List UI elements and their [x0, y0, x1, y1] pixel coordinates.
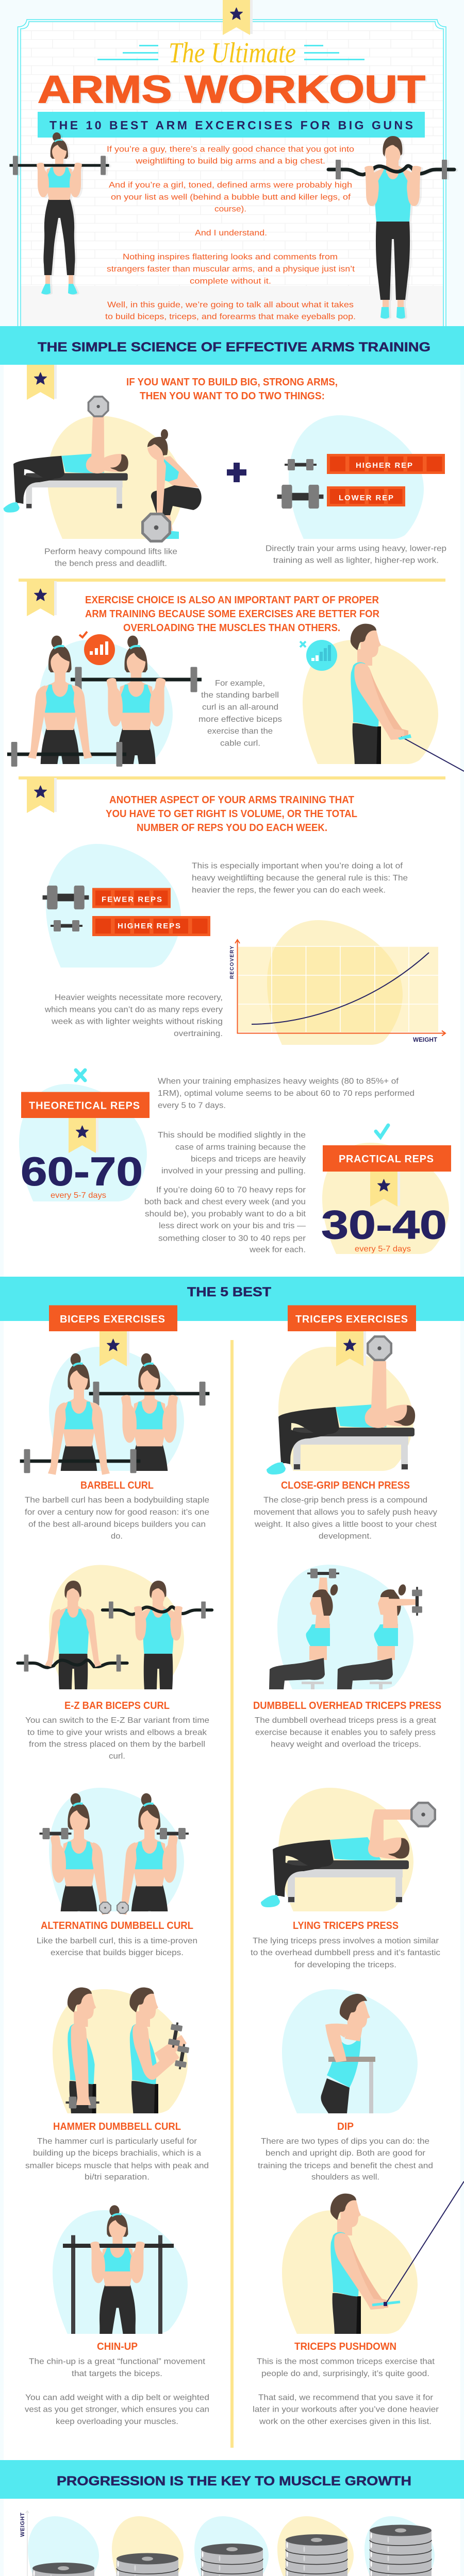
description: heavy weight and overload the triceps.: [271, 1740, 421, 1749]
figure: women barbell curl: [7, 636, 202, 767]
icon: cross: [76, 1070, 85, 1080]
description: You can add weight with a dip belt or weighted: [25, 2394, 209, 2402]
figure: [65, 1988, 190, 2123]
description: do.: [111, 1532, 123, 1540]
label: lower rep: [327, 486, 405, 506]
name: BARBELL CURL: [80, 1480, 154, 1491]
heading: ANOTHER ASPECT OF YOUR ARMS TRAINING THAT: [109, 794, 354, 806]
section banner: progression: [0, 2460, 464, 2499]
description: smaller biceps muscle that helps with peak and: [25, 2162, 209, 2170]
ribbon: [27, 365, 57, 400]
example text: exercise than the: [207, 727, 273, 736]
intro text: strangers faster than muscular arms, and a physique just isn’t: [107, 265, 355, 274]
description: [25, 1716, 209, 1761]
example text: For example,: [215, 679, 265, 688]
description: training the triceps and benefit the chest and: [258, 2162, 433, 2170]
caption right: Directly train your arms using heavy, lower-rep: [266, 544, 446, 553]
icon: large dumbbell: [43, 886, 89, 909]
description: The barbell curl has been a bodybuilding staple: [25, 1496, 209, 1504]
blob: yellow: [47, 416, 184, 539]
label: higher rep: HIGHER REP: [356, 461, 412, 470]
figure: [321, 1994, 375, 2113]
description: from the stress placed on them by the barbell: [29, 1740, 205, 1749]
every 5-7 days: every 5-7 days: [51, 1191, 106, 1200]
description: [253, 2358, 439, 2426]
description: of the best all-around biceps builders you can: [28, 1520, 206, 1529]
description: vest as you get stronger, which ensures you can: [25, 2405, 209, 2414]
heading: IF YOU WANT TO BUILD BIG, STRONG ARMS,: [126, 377, 338, 388]
description: [258, 2137, 433, 2181]
description: There are two types of dips you can do: the: [261, 2137, 429, 2146]
description: [25, 1496, 209, 1540]
exercise: lying triceps press: [251, 1788, 440, 1969]
modified volume text: should be), you probably want to do a bit: [145, 1210, 306, 1218]
figure: [261, 1802, 436, 1907]
name: ALTERNATING DUMBBELL CURL: [41, 1920, 193, 1931]
blob: cyan: [46, 844, 181, 968]
blob: [49, 1788, 184, 1911]
exercise: close-grip bench press: [254, 1331, 437, 1540]
script title: The Ultimate: The Ultimate: [169, 37, 296, 69]
ribbon with star: [223, 0, 253, 35]
theoretical text: every 5 to 7 days.: [158, 1101, 226, 1110]
heading: EXERCISE CHOICE IS ALSO AN IMPORTANT PART OF PROPER: [85, 595, 379, 606]
label: THEORETICAL REPS: [29, 1100, 140, 1112]
modified volume text: both back and chest every week (and you: [144, 1197, 306, 1207]
description: bi/tri separation.: [85, 2173, 150, 2181]
icon: plus: [227, 463, 246, 482]
description: The dumbbell overhead triceps press is a great: [255, 1716, 437, 1725]
example text: curl is an all-around: [202, 703, 278, 712]
figure: man with EZ bar: [328, 136, 454, 318]
description: [25, 2358, 209, 2426]
ribbon: [370, 1172, 400, 1207]
stack 5: [370, 2524, 432, 2576]
label: lower rep: LOWER REP: [339, 494, 393, 502]
name: DUMBBELL OVERHEAD TRICEPS PRESS: [253, 1700, 441, 1711]
caption left: [44, 547, 177, 568]
intro text: on your list as well (behind a bubble butt and killer legs, of: [111, 193, 351, 202]
name: CHIN-UP: [97, 2341, 138, 2352]
heading: YOU HAVE TO GET RIGHT IS VOLUME, OR THE TOTAL: [106, 808, 357, 820]
modified volume text: case of arms training because the: [175, 1143, 306, 1152]
icon: large dumbbell: [277, 485, 323, 509]
exercise: triceps pushdown: [253, 2181, 464, 2426]
description: The chin-up is a great “functional” movement: [29, 2358, 206, 2366]
ribbon: [69, 1118, 98, 1153]
caption right: [266, 544, 446, 565]
label: higher reps: [92, 916, 210, 936]
description: for over a century now for good reason: it’s one: [25, 1508, 209, 1517]
intro text: Well, in this guide, we’re going to talk all about what it takes: [107, 301, 354, 309]
panel: two things: [4, 365, 446, 568]
heading: [85, 595, 380, 634]
description: [255, 1716, 437, 1749]
title flourish lines: [97, 45, 364, 60]
description: development.: [319, 1532, 372, 1540]
section banner: the 5 best: THE 5 BEST: [187, 1285, 271, 1299]
name: E-Z BAR BICEPS CURL: [64, 1700, 170, 1711]
description: The lying triceps press involves a motion similar: [253, 1937, 439, 1945]
exercise: barbell curl: [20, 1331, 209, 1538]
example text: the standing barbell: [201, 691, 279, 700]
heading: THEN YOU WANT TO DO TWO THINGS:: [140, 391, 325, 402]
figure: [39, 1793, 189, 1915]
description: [25, 2137, 209, 2181]
blob: [277, 1565, 413, 1689]
decorative frame: [18, 20, 446, 326]
explanation text: This is especially important when you’re doing a lot of: [192, 861, 403, 871]
description: for developing the triceps.: [294, 1961, 396, 1969]
theoretical reps card: [19, 1070, 150, 1201]
description: The close-grip bench press is a compound: [263, 1496, 427, 1504]
blob: yellow: [322, 1143, 449, 1254]
caption right: training as well as lighter, higher-rep work.: [273, 556, 439, 565]
intro text: And I understand.: [195, 229, 267, 238]
theoretical text: 1RM), optimal volume seems to be about 60 to 70 reps performed: [158, 1089, 415, 1098]
exercise: dip: [258, 1989, 433, 2181]
description: bench and upright dip. Both are good for: [266, 2149, 426, 2158]
section banner: the 5 best: [0, 1277, 464, 1321]
figure: [269, 1569, 422, 1690]
blob: [282, 2210, 418, 2334]
figure: woman deadlift: [141, 429, 202, 543]
blob: cyan: [289, 415, 424, 539]
description: exercise that builds bigger biceps.: [51, 1948, 184, 1957]
heading: [106, 794, 357, 834]
section banner: progression: PROGRESSION IS THE KEY TO MUSCLE GROWTH: [57, 2474, 411, 2488]
recovery text: overtraining.: [174, 1029, 223, 1038]
description: Like the barbell curl, this is a time-proven: [37, 1937, 197, 1945]
description: later in your workouts after you’ve done heavier: [253, 2405, 439, 2414]
subtitle banner: THE 10 BEST ARM EXCERCISES FOR BIG GUNS: [49, 118, 413, 132]
blob: [49, 1347, 184, 1471]
label: fewer reps: [92, 888, 171, 908]
label: higher rep: [327, 454, 445, 474]
description: that targets the biceps.: [72, 2369, 162, 2378]
label: [21, 1092, 150, 1118]
modified volume text: [144, 1131, 306, 1254]
brick wall background: [21, 22, 443, 326]
figure: [16, 1581, 213, 1689]
practical reps card: [321, 1125, 451, 1254]
blob: [53, 2210, 188, 2334]
name: LYING TRICEPS PRESS: [293, 1920, 399, 1931]
description: keep overloading your muscles.: [56, 2417, 178, 2426]
figure: [20, 1353, 209, 1475]
blob: [282, 1989, 418, 2113]
figure: [267, 1335, 415, 1475]
column divider: [230, 1340, 234, 2448]
figure: man bench press: [4, 396, 128, 513]
icon: effective check badge: [79, 632, 115, 665]
theoretical text: [158, 1077, 415, 1110]
main title: ARMS WORKOUT: [38, 67, 425, 111]
stack 1: [32, 2563, 94, 2576]
description: shoulders as well.: [311, 2173, 379, 2181]
figure: man cable curl: [351, 624, 464, 771]
intro text: If you’re a guy, there’s a really good chance that you got into: [107, 145, 354, 154]
intro text: And if you’re a girl, toned, defined arms were probably high: [109, 181, 352, 190]
intro text: to build biceps, triceps, and forearms that make eyeballs pop.: [105, 312, 356, 321]
label: [323, 1145, 451, 1172]
exercise: E-Z bar biceps curl: [18, 1565, 212, 1761]
blob: [53, 1989, 188, 2113]
progression chart: [20, 2511, 451, 2576]
recovery text: week as with lighter weights without risking: [51, 1017, 223, 1026]
blob: yellow: [303, 640, 438, 764]
modified volume text: something closer to 30 to 40 reps per: [158, 1234, 306, 1243]
description: building up the biceps brachialis, which is a: [33, 2149, 201, 2158]
y axis label: RECOVERY: [229, 946, 235, 979]
recovery text: Heavier weights necessitate more recovery,: [55, 993, 223, 1002]
column header: biceps: [49, 1306, 177, 1331]
blob: [49, 1565, 184, 1689]
section banner: simple science: THE SIMPLE SCIENCE OF EFFECTIVE ARMS TRAINING: [38, 340, 430, 354]
blob: [278, 1347, 413, 1471]
icon: small dumbbell: [51, 920, 82, 931]
ribbon: [336, 1331, 366, 1366]
name: HAMMER DUMBBELL CURL: [53, 2121, 181, 2132]
caption left: Perform heavy compound lifts like: [44, 547, 177, 556]
blob: yellow: [267, 920, 403, 1045]
exercise: chin-up: [25, 2205, 209, 2426]
theoretical text: When your training emphasizes heavy weights (80 to 85%+ of: [158, 1077, 399, 1086]
column header: triceps: TRICEPS EXERCISES: [295, 1314, 408, 1325]
column header: biceps: BICEPS EXERCISES: [60, 1314, 165, 1325]
panel: intro header: [9, 0, 454, 326]
every 5-7 days: every 5-7 days: [355, 1245, 411, 1253]
heading: NUMBER OF REPS YOU DO EACH WEEK.: [137, 822, 327, 834]
description: to the overhead dumbbell press and it’s fantastic: [251, 1948, 440, 1957]
blob: cyan: [19, 1084, 147, 1201]
stack 3: [201, 2544, 263, 2576]
example text: [198, 679, 282, 748]
heading: ARM TRAINING BECAUSE SOME EXERCISES ARE BETTER FOR: [85, 608, 380, 620]
modified volume text: week for each.: [249, 1246, 306, 1254]
label: higher reps: HIGHER REPS: [118, 922, 180, 930]
stack 4: [286, 2534, 347, 2576]
modified volume text: If you’re doing 60 to 70 heavy reps for: [156, 1186, 306, 1194]
woman arms bent: [337, 1584, 422, 1690]
intro text: [105, 145, 356, 321]
description: That said, we recommend that you save it for: [258, 2394, 434, 2402]
recovery text: which means you can’t do as many reps every: [44, 1006, 223, 1014]
panel: exercise choice: [7, 579, 464, 772]
heading: OVERLOADING THE MUSCLES THAN OTHERS.: [123, 622, 340, 634]
description: to time to give your wrists and elbows a break: [27, 1728, 207, 1737]
description: The hammer curl is particularly useful for: [37, 2137, 197, 2146]
description: curl.: [109, 1752, 125, 1761]
name: DIP: [337, 2121, 354, 2132]
modified volume text: biceps and triceps are heavily: [191, 1155, 306, 1163]
stack 2: [117, 2553, 178, 2576]
x axis label: WEIGHT: [413, 1036, 438, 1043]
description: [254, 1496, 437, 1540]
figure: woman with barbell: [9, 132, 109, 295]
exercise: hammer dumbbell curl: [25, 1988, 209, 2181]
exercise: alternating dumbbell curl: [37, 1788, 197, 1957]
description: [37, 1937, 197, 1957]
panel: volume: [19, 776, 451, 1254]
explanation text: heavier the reps, the fewer you can do each week.: [192, 886, 386, 894]
ribbon: [27, 778, 57, 813]
description: exercise because it enables you to safely press: [255, 1728, 436, 1737]
description: [251, 1937, 440, 1969]
intro text: complete without it.: [190, 277, 271, 285]
name: TRICEPS PUSHDOWN: [294, 2341, 396, 2352]
woman arms extended: [269, 1569, 339, 1690]
icon: less effective badge: [300, 640, 337, 671]
recovery chart: [229, 920, 445, 1045]
section banner: simple science: [0, 326, 464, 365]
number: 60-70: [21, 1149, 143, 1194]
intro text: course).: [214, 205, 246, 213]
explanation text: heavy weightlifting because the general rule is this: The: [192, 874, 408, 883]
description: weight. It also gives a little boost to your chest: [254, 1520, 437, 1529]
blob: cyan: [39, 640, 173, 764]
example text: more effective biceps: [198, 715, 282, 724]
ribbon: [100, 1331, 129, 1366]
label: fewer reps: FEWER REPS: [102, 895, 162, 904]
explanation text: [192, 861, 408, 894]
exercise: dumbbell overhead triceps press: [253, 1565, 441, 1749]
subtitle banner: [38, 112, 425, 138]
intro text: weightlifting to build big arms and a big chest.: [135, 157, 325, 166]
background blobs: [28, 2516, 435, 2576]
caption left: the bench press and deadlift.: [55, 560, 167, 568]
figure: [330, 2181, 464, 2337]
intro text: Nothing inspires flattering looks and comments from: [123, 252, 338, 262]
modified volume text: involved in your pressing and pulling.: [161, 1166, 306, 1176]
heading: [126, 377, 338, 402]
modified volume text: less direct work on your bis and tris —: [159, 1222, 306, 1230]
blob: [278, 1788, 413, 1911]
description: movement that allows you to safely push heavy: [254, 1508, 437, 1517]
description: You can switch to the E-Z Bar variant from time: [25, 1716, 209, 1725]
modified volume text: This should be modified slightly in the: [158, 1131, 306, 1140]
column header: triceps: [288, 1306, 416, 1331]
label: PRACTICAL REPS: [339, 1154, 434, 1165]
ribbon: [27, 581, 57, 616]
example text: cable curl.: [220, 739, 260, 748]
y axis label: WEIGHT: [20, 2513, 26, 2537]
description: work on the other exercises given in this list.: [259, 2417, 432, 2426]
number: 30-40: [321, 1202, 447, 1247]
name: CLOSE-GRIP BENCH PRESS: [281, 1480, 410, 1491]
icon: small dumbbell: [285, 459, 317, 470]
icon: check: [376, 1125, 388, 1137]
recovery text: [44, 993, 223, 1038]
figure: [63, 2205, 174, 2334]
description: This is the most common triceps exercise that: [257, 2358, 435, 2366]
description: people do and, surprisingly, it’s quite good.: [261, 2369, 429, 2378]
